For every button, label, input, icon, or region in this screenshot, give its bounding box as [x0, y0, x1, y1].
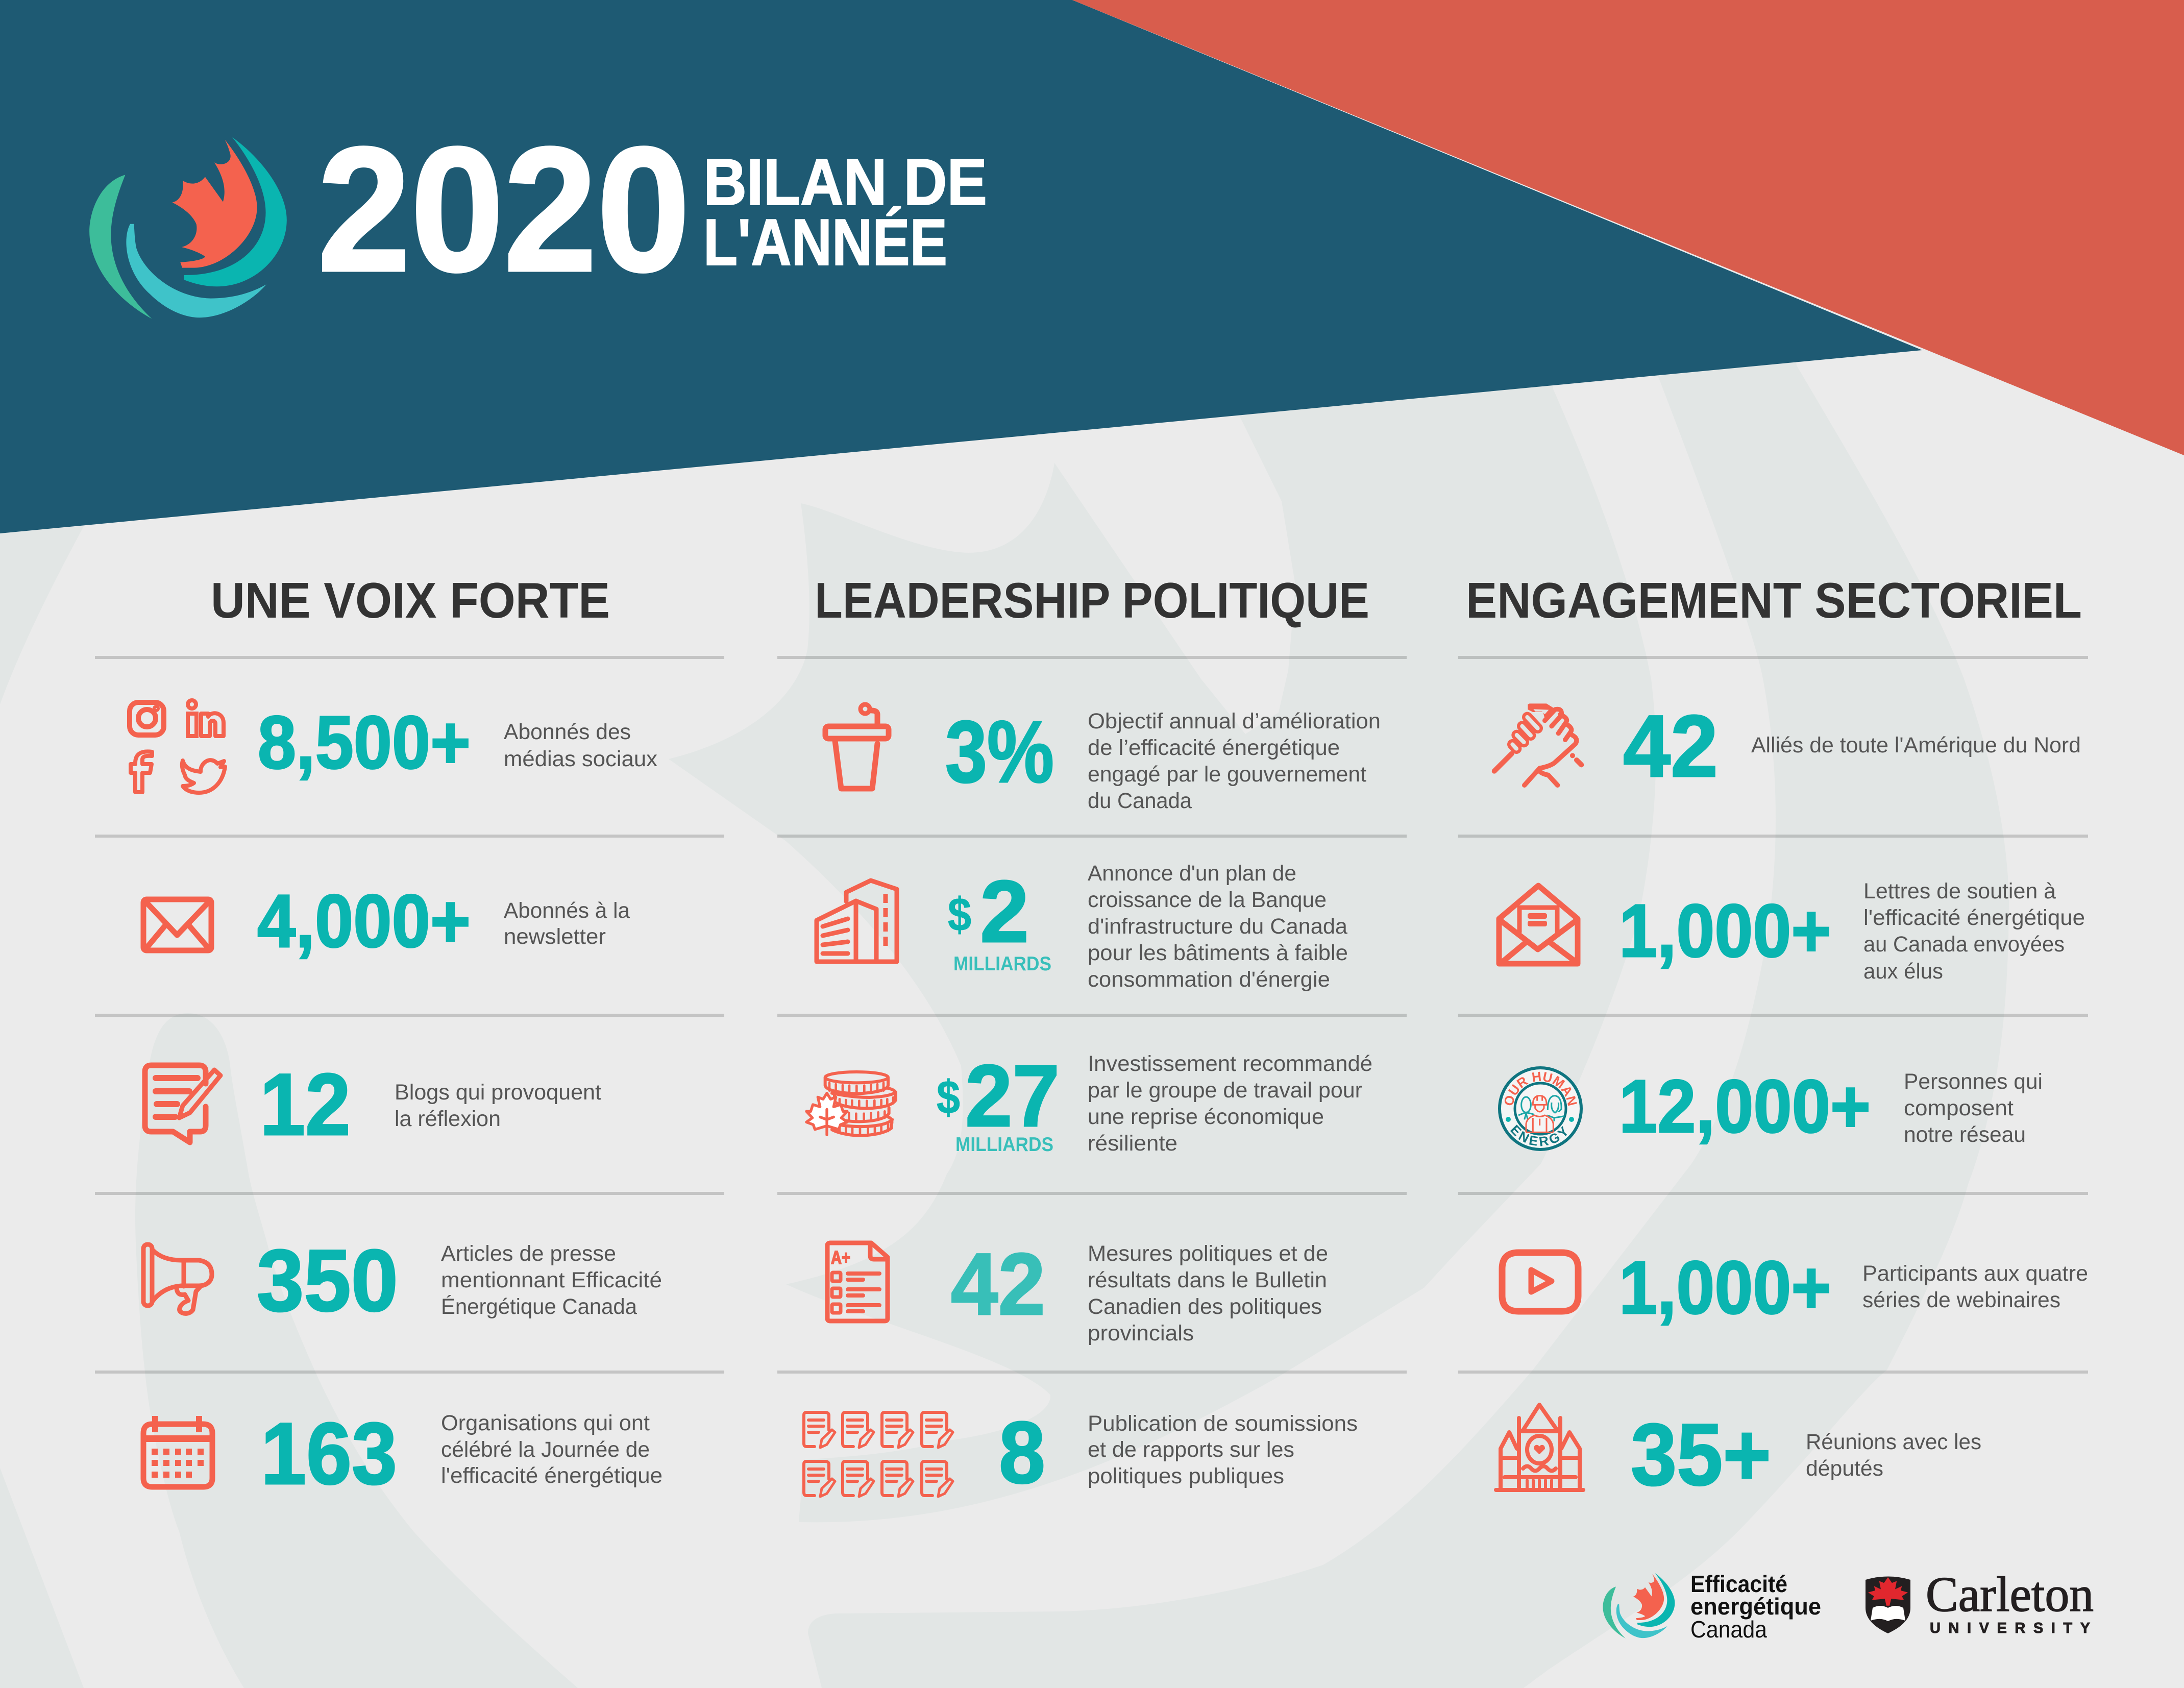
stat row: webinars: [1502, 1246, 2088, 1330]
description: MP meetings: [1806, 1430, 1981, 1481]
description: MP meetings: Réunions avec les: [1806, 1430, 1981, 1454]
icon: buildings: [817, 880, 897, 962]
description: infrastructure bank: croissance de la Banque: [1088, 888, 1327, 912]
description: newsletter: newsletter: [504, 924, 606, 949]
description: subscribers: Abonnés des: [504, 720, 631, 744]
icon: social media: [130, 700, 225, 793]
number: 4,000+: 4,000+: [257, 879, 471, 963]
description: organisations: célébré la Journée de: [441, 1437, 650, 1462]
stat row: $2 billion: [817, 861, 1348, 992]
heading: une voix forte: UNE VOIX FORTE: [211, 572, 610, 628]
description: infrastructure bank: Annonce d'un plan de: [1088, 861, 1296, 886]
description: press: Énergétique Canada: [441, 1294, 637, 1319]
header: dark blue banner: [0, 0, 1922, 533]
icon: eight documents with pens: [804, 1412, 953, 1497]
number: 1,000+: 1,000+: [1619, 1246, 1831, 1330]
icon: megaphone: [143, 1244, 212, 1313]
stat row: publications: [804, 1404, 1358, 1502]
stat row: policy scorecard: [827, 1235, 1328, 1345]
description: webinars: séries de webinaires: [1862, 1288, 2060, 1312]
heading: engagement sectoriel: ENGAGEMENT SECTORIEL: [1466, 572, 2082, 628]
description: recovery investment: Investissement recommandé: [1088, 1051, 1372, 1076]
icon: our human energy badge: [1498, 1066, 1583, 1151]
description: press: mentionnant Efficacité: [441, 1268, 662, 1292]
number: $2 milliards: MILLIARDS: [953, 953, 1051, 975]
description: recovery investment: une reprise économique: [1088, 1105, 1324, 1129]
icon: coins with maple leaf: [806, 1072, 896, 1136]
icon: blog document with pen: [145, 1065, 220, 1142]
column: engagement sectoriel: [1458, 572, 2088, 1504]
description: annual target: Objectif annual d’amélioration: [1088, 709, 1381, 733]
description: letters: au Canada envoyées: [1863, 932, 2065, 957]
number: 12,000+: 12,000+: [1619, 1065, 1871, 1148]
heading: leadership politique: LEADERSHIP POLITIQUE: [815, 572, 1369, 628]
description: scorecard: Mesures politiques et de: [1088, 1241, 1328, 1266]
number: $2 milliards: $: [948, 889, 971, 941]
column: leadership politique: [777, 572, 1407, 1502]
description: blogs: la réflexion: [395, 1107, 501, 1131]
description: infrastructure bank: pour les bâtiments à faible: [1088, 941, 1348, 965]
description: letters: l'efficacité énergétique: [1863, 906, 2085, 930]
text: organisation name: [1690, 1571, 1821, 1643]
description: MP meetings: députés: [1806, 1456, 1883, 1481]
description: scorecard: provincials: [1088, 1321, 1194, 1345]
description: press: [441, 1241, 662, 1319]
description: publications: Publication de soumissions: [1088, 1411, 1358, 1436]
title: 2020 bilan de l'année: 2020: [317, 110, 690, 308]
number: $27 milliards: 27: [965, 1047, 1060, 1145]
icon: our human energy badge: ENERGY: [1510, 1124, 1567, 1146]
icon: graded report: [827, 1243, 888, 1321]
title: 2020 bilan de l'année: [317, 110, 987, 308]
description: annual target: engagé par le gouvernement: [1088, 762, 1366, 787]
description: newsletter: Abonnés à la: [504, 898, 630, 923]
number: 35+: 35+: [1631, 1406, 1771, 1504]
description: scorecard: [1088, 1241, 1328, 1345]
title: 2020 bilan de l'année: BILAN DE: [703, 145, 987, 219]
description: publications: [1088, 1411, 1358, 1488]
description: network: notre réseau: [1904, 1122, 2026, 1147]
stat row: organisations: [143, 1405, 662, 1503]
description: webinars: [1862, 1261, 2088, 1312]
logo: Efficiency Canada maple swirl: [89, 137, 287, 319]
description: annual target: du Canada: [1088, 789, 1192, 813]
description: publications: et de rapports sur les: [1088, 1437, 1294, 1462]
description: recovery investment: par le groupe de travail pour: [1088, 1078, 1362, 1103]
icon: open envelope with letter: [1499, 886, 1578, 964]
description: allies: Alliés de toute l'Amérique du Nord: [1751, 733, 2081, 757]
number: 42: 42: [1623, 697, 1718, 795]
description: annual target: de l’efficacité énergétique: [1088, 736, 1340, 760]
description: organisations: Organisations qui ont: [441, 1411, 650, 1435]
description: infrastructure bank: d'infrastructure du Canada: [1088, 914, 1347, 939]
icon: podium: [825, 704, 889, 789]
number: 1,000+: 1,000+: [1619, 889, 1831, 973]
stat row: 3% target: [825, 703, 1381, 813]
description: subscribers: médias sociaux: [504, 747, 657, 771]
number: 163: 163: [261, 1405, 397, 1503]
stat row: MP meetings: [1496, 1405, 1981, 1504]
background watermark: giant logo: [0, 327, 2009, 1688]
stat row: letters: [1499, 879, 2085, 984]
description: letters: aux élus: [1863, 959, 1943, 984]
description: blogs: Blogs qui provoquent: [395, 1080, 601, 1105]
icon: our human energy badge: OUR HUMAN: [1505, 1072, 1577, 1106]
number: 42: 42: [951, 1235, 1045, 1333]
description: letters: Lettres de soutien à: [1863, 879, 2056, 903]
description: organisations: [441, 1411, 662, 1488]
description: annual target: [1088, 709, 1381, 813]
description: scorecard: Canadien des politiques: [1088, 1294, 1322, 1319]
description: recovery investment: résiliente: [1088, 1131, 1177, 1156]
icon: video play: [1502, 1253, 1578, 1311]
stat row: newsletter: [143, 879, 630, 963]
number: 3%: 3%: [945, 703, 1054, 801]
footer logo: Efficacité énergétique Canada: [1603, 1571, 1821, 1643]
icon: small maple swirl: [1603, 1573, 1675, 1638]
stat row: $27 billion: [806, 1047, 1372, 1156]
description: recovery investment: [1088, 1051, 1372, 1156]
description: network: composent: [1904, 1096, 2014, 1120]
description: scorecard: résultats dans le Bulletin: [1088, 1268, 1327, 1292]
description: infrastructure bank: consommation d'énergie: [1088, 967, 1330, 992]
text: organisation name: Canada: [1690, 1616, 1767, 1643]
stat row: allies: [1494, 697, 2081, 795]
number: $27 milliards: $: [937, 1071, 960, 1123]
number: $2 milliards: 2: [980, 863, 1029, 961]
text: University: UNIVERSITY: [1930, 1620, 2090, 1636]
number: 8,500+: 8,500+: [258, 701, 471, 785]
description: webinars: Participants aux quatre: [1862, 1261, 2088, 1286]
stat row: network: [1498, 1065, 2043, 1151]
description: network: Personnes qui: [1904, 1069, 2043, 1094]
number: $27 milliards: MILLIARDS: [955, 1134, 1053, 1156]
icon: parliament building: [1496, 1405, 1583, 1490]
number: $27 milliards: [937, 1047, 1060, 1156]
description: letters: [1863, 879, 2085, 984]
icon: calendar: [143, 1416, 212, 1487]
description: newsletter: [504, 898, 630, 949]
description: organisations: l'efficacité énergétique: [441, 1463, 662, 1488]
footer logo: Carleton University: [1866, 1567, 2094, 1636]
column: une voix forte: [95, 572, 724, 1503]
stat row: social media subscribers: [130, 700, 657, 793]
description: infrastructure bank: [1088, 861, 1348, 992]
text: Carleton: Carleton: [1926, 1567, 2094, 1622]
description: blogs: [395, 1080, 601, 1131]
icon: envelope: [143, 899, 211, 950]
description: network: [1904, 1069, 2043, 1147]
description: publications: politiques publiques: [1088, 1464, 1284, 1488]
icon: clasped hands: [1494, 703, 1581, 785]
text: organisation name: energétique: [1690, 1593, 1821, 1620]
number: 12: 12: [260, 1056, 351, 1154]
icon: Carleton shield: [1866, 1576, 1910, 1633]
header: red corner triangle: [1072, 0, 2184, 455]
description: press: Articles de presse: [441, 1241, 616, 1266]
text: organisation name: Efficacité: [1690, 1571, 1787, 1597]
number: 350: 350: [257, 1232, 398, 1330]
icon: graded report: A+: [831, 1247, 850, 1268]
title: 2020 bilan de l'année: L'ANNÉE: [703, 206, 947, 279]
stat row: press articles: [143, 1232, 662, 1330]
number: $2 milliards: [948, 863, 1051, 975]
description: subscribers: [504, 720, 657, 771]
number: 8: 8: [999, 1404, 1045, 1502]
stat row: blogs: [145, 1056, 601, 1154]
